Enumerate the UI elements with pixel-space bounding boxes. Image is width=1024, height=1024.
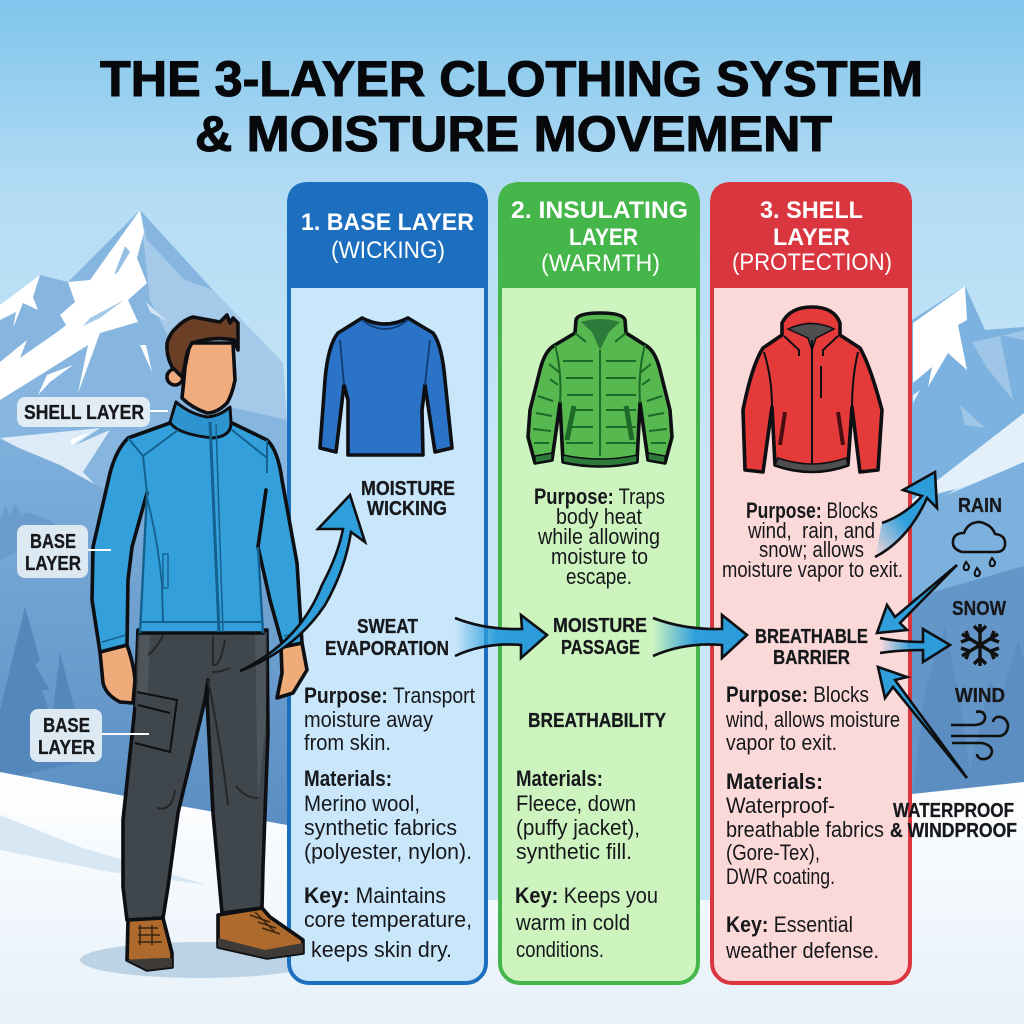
panel: base layer xyxy=(287,182,488,983)
icon: cargo pocket xyxy=(135,692,177,752)
icon: left boot xyxy=(127,918,172,970)
icon: right boot xyxy=(218,908,303,958)
text: shell materials: Waterproof- xyxy=(726,793,835,818)
text: insulating key: warm in cold xyxy=(515,910,630,935)
arrow: evaporation to moisture passage xyxy=(455,615,547,658)
weather: snow xyxy=(952,598,1006,666)
text: shell purpose lower: vapor to exit. xyxy=(726,730,837,755)
heading: shell layer: 3. SHELL xyxy=(760,197,863,224)
text: base materials xyxy=(304,766,472,864)
icon: right hand xyxy=(277,643,307,698)
label: sweat evaporation xyxy=(325,616,449,660)
text: shell materials: Materials: xyxy=(726,769,823,794)
label: breathability: BREATHABILITY xyxy=(528,710,667,732)
text: base key: core temperature, xyxy=(304,907,472,932)
icon: red shell jacket xyxy=(743,307,882,472)
text: insulating materials xyxy=(516,766,640,864)
text: insulating purpose: moisture to xyxy=(551,544,648,569)
text: insulating materials: Materials: xyxy=(516,766,603,791)
heading: shell layer: (PROTECTION) xyxy=(732,249,892,276)
arrow: sweat up to moisture wicking xyxy=(240,495,365,671)
heading: shell layer: LAYER xyxy=(773,224,850,251)
callout: base layer lower: BASE xyxy=(43,715,90,737)
text: shell purpose lower xyxy=(725,682,900,755)
weather: snow: SNOW xyxy=(952,598,1006,620)
label: moisture wicking: MOISTURE xyxy=(361,478,455,500)
label: moisture wicking xyxy=(361,478,455,520)
text: shell key: weather defense. xyxy=(725,938,879,963)
title: & MOISTURE MOVEMENT xyxy=(195,106,832,162)
text: base materials: (polyester, nylon). xyxy=(304,839,472,864)
text: base key: keeps skin dry. xyxy=(311,937,452,962)
icon: snowflake xyxy=(961,624,999,666)
callout: base layer upper: LAYER xyxy=(25,553,81,575)
text: base purpose: from skin. xyxy=(304,730,391,755)
text: shell purpose lower: Purpose: Blocks xyxy=(726,682,869,707)
arrow: barrier to snow xyxy=(880,629,950,662)
weather: wind: WIND xyxy=(955,685,1005,707)
callout: base layer lower: LAYER xyxy=(38,737,95,759)
text: insulating materials: (puffy jacket), xyxy=(516,815,640,840)
icon: wind lines xyxy=(951,712,1008,759)
text: shell key xyxy=(725,912,879,963)
label: breathable barrier: BARRIER xyxy=(773,647,850,669)
arrow: vapour exit upward xyxy=(875,472,937,557)
label: sweat evaporation: SWEAT xyxy=(357,616,418,638)
heading: insulating layer: LAYER xyxy=(569,224,638,251)
icon: jacket collar xyxy=(170,402,231,438)
text: base purpose: Purpose: Transport xyxy=(304,683,475,708)
text: insulating purpose: while allowing xyxy=(537,524,660,549)
icon: jacket fill xyxy=(92,423,302,652)
text: base materials: synthetic fabrics xyxy=(304,815,457,840)
panel: shell layer xyxy=(710,182,912,983)
text: insulating materials: synthetic fill. xyxy=(516,839,632,864)
text: base purpose xyxy=(304,683,475,755)
icon: hair xyxy=(167,315,238,377)
jacket outlines xyxy=(92,423,302,652)
heading: insulating layer xyxy=(498,182,700,288)
person figure wearing layers xyxy=(92,315,307,970)
label: breathable barrier: BREATHABLE xyxy=(755,626,868,648)
label: sweat evaporation: EVAPORATION xyxy=(325,638,449,660)
text: insulating key: Key: Keeps you xyxy=(515,883,658,908)
weather: rain: RAIN xyxy=(958,495,1002,517)
text: shell purpose upper: snow; allows xyxy=(759,537,864,562)
text: insulating materials: Fleece, down xyxy=(516,791,636,816)
label: moisture passage: PASSAGE xyxy=(561,637,640,659)
text: insulating key: conditions. xyxy=(516,937,604,962)
label: moisture passage xyxy=(553,615,647,659)
weather: wind xyxy=(951,685,1008,759)
callout: base layer upper xyxy=(17,525,111,578)
title: THE 3-LAYER CLOTHING SYSTEM xyxy=(100,51,923,107)
callout: shell layer: SHELL LAYER xyxy=(24,402,144,424)
text: base key: Key: Maintains xyxy=(304,883,446,908)
text: shell materials: (Gore-Tex), xyxy=(726,840,820,865)
text: shell purpose lower: wind, allows moisture xyxy=(725,707,900,732)
label: moisture wicking: WICKING xyxy=(367,498,447,520)
text: base key xyxy=(304,883,472,962)
icon: ear xyxy=(167,369,183,385)
text: insulating purpose: Purpose: Traps xyxy=(534,484,665,509)
callout: base layer upper: BASE xyxy=(30,531,76,553)
weather: rain xyxy=(953,495,1005,576)
text: insulating purpose: escape. xyxy=(566,564,632,589)
icon: rain cloud xyxy=(953,522,1005,576)
icon: face xyxy=(182,343,235,413)
title xyxy=(100,51,923,162)
arrow: rain to barrier xyxy=(877,565,957,633)
jacket seams xyxy=(102,422,301,642)
text: base materials: Materials: xyxy=(304,766,392,791)
text: shell key: Key: Essential xyxy=(726,912,853,937)
panel: insulating layer xyxy=(498,182,700,983)
text: shell materials xyxy=(726,769,884,889)
callout: shell layer xyxy=(17,397,168,427)
heading: base layer: (WICKING) xyxy=(331,237,445,264)
text: shell purpose upper: moisture vapor to exit. xyxy=(722,557,903,582)
icon: blue base layer shirt xyxy=(320,318,452,455)
text: shell materials: breathable fabrics xyxy=(726,817,884,842)
text: insulating purpose: body heat xyxy=(556,504,642,529)
text: base materials: Merino wool, xyxy=(304,791,420,816)
text: base purpose: moisture away xyxy=(304,707,433,732)
label: breathable barrier xyxy=(755,626,868,669)
text: shell purpose upper: Purpose: Blocks xyxy=(746,498,878,523)
text: shell materials: DWR coating. xyxy=(726,864,835,889)
text: shell purpose upper xyxy=(722,498,903,582)
icon: pants xyxy=(123,630,268,920)
icon: left hand xyxy=(100,645,135,703)
heading: insulating layer: (WARMTH) xyxy=(541,250,660,277)
text: insulating purpose xyxy=(534,484,665,589)
heading: shell layer xyxy=(710,182,912,288)
text: shell purpose upper: wind, rain, and xyxy=(747,518,875,543)
heading: base layer: 1. BASE LAYER xyxy=(301,209,474,236)
label: waterproof and windproof xyxy=(890,800,1017,842)
text: insulating key xyxy=(515,883,658,962)
arrow: passage to breathable barrier xyxy=(653,615,747,658)
arrow: wind to barrier xyxy=(878,667,967,778)
heading: insulating layer: 2. INSULATING xyxy=(511,197,688,224)
icon: green puffy jacket xyxy=(528,313,672,466)
label: moisture passage: MOISTURE xyxy=(553,615,647,637)
callout: base layer lower xyxy=(30,709,149,762)
heading: base layer xyxy=(287,182,488,288)
